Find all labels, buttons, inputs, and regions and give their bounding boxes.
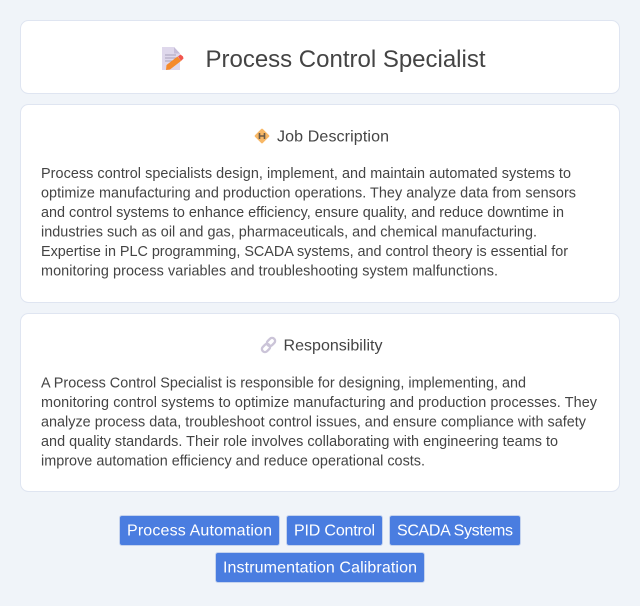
panel: job description bbox=[20, 104, 620, 302]
panel: responsibility bbox=[20, 314, 620, 492]
tag: pid control: PID Control bbox=[294, 522, 375, 540]
icon: document with pencil bbox=[162, 47, 184, 70]
text: job description body: Expertise in PLC programming, SCADA systems, and control theory is essential for bbox=[41, 244, 568, 260]
tag: instrumentation calibration: Instrumentation Calibration bbox=[223, 560, 417, 576]
title text: Process Control Specialist bbox=[206, 46, 486, 73]
text: job description body: and control systems to enhance efficiency, ensure quality, and reduce downtime in bbox=[41, 205, 564, 221]
text: responsibility body: A Process Control Specialist is responsible for designing, implementing, and bbox=[41, 376, 526, 392]
tag: scada systems: SCADA Systems bbox=[397, 522, 513, 540]
heading: job description: Job Description bbox=[277, 128, 389, 146]
tag: instrumentation calibration bbox=[216, 552, 424, 582]
tag: scada systems bbox=[390, 516, 520, 546]
text: job description body: Process control specialists design, implement, and maintain automated systems to bbox=[41, 166, 571, 182]
tag: process automation bbox=[120, 516, 280, 546]
tag: process automation: Process Automation bbox=[127, 522, 272, 540]
text: job description body: industries such as oil and gas, pharmaceuticals, and chemical manufacturing. bbox=[41, 224, 537, 240]
text: responsibility body: and quality standards. Their role involves collaborating with engineering teams to bbox=[41, 434, 558, 450]
text: job description body: optimize manufacturing and production operations. They analyze data from sensors bbox=[41, 186, 576, 202]
heading: responsibility: Responsibility bbox=[284, 338, 382, 354]
text: job description body bbox=[41, 166, 576, 280]
text: job description body: monitoring process variables and troubleshooting system malfunctions. bbox=[41, 264, 498, 280]
text: responsibility body bbox=[41, 376, 598, 470]
icon: warning diamond bbox=[254, 128, 270, 144]
text: responsibility body: improve automation efficiency and reduce operational costs. bbox=[41, 454, 425, 470]
text: responsibility body: analyze process data, troubleshoot control issues, and ensure compliance with safety bbox=[41, 414, 587, 430]
text: responsibility body: monitoring control systems to optimize manufacturing and production processes. They bbox=[41, 395, 598, 411]
panel: title bbox=[20, 20, 620, 94]
icon: chain link bbox=[261, 337, 276, 353]
tag: pid control bbox=[286, 516, 382, 546]
